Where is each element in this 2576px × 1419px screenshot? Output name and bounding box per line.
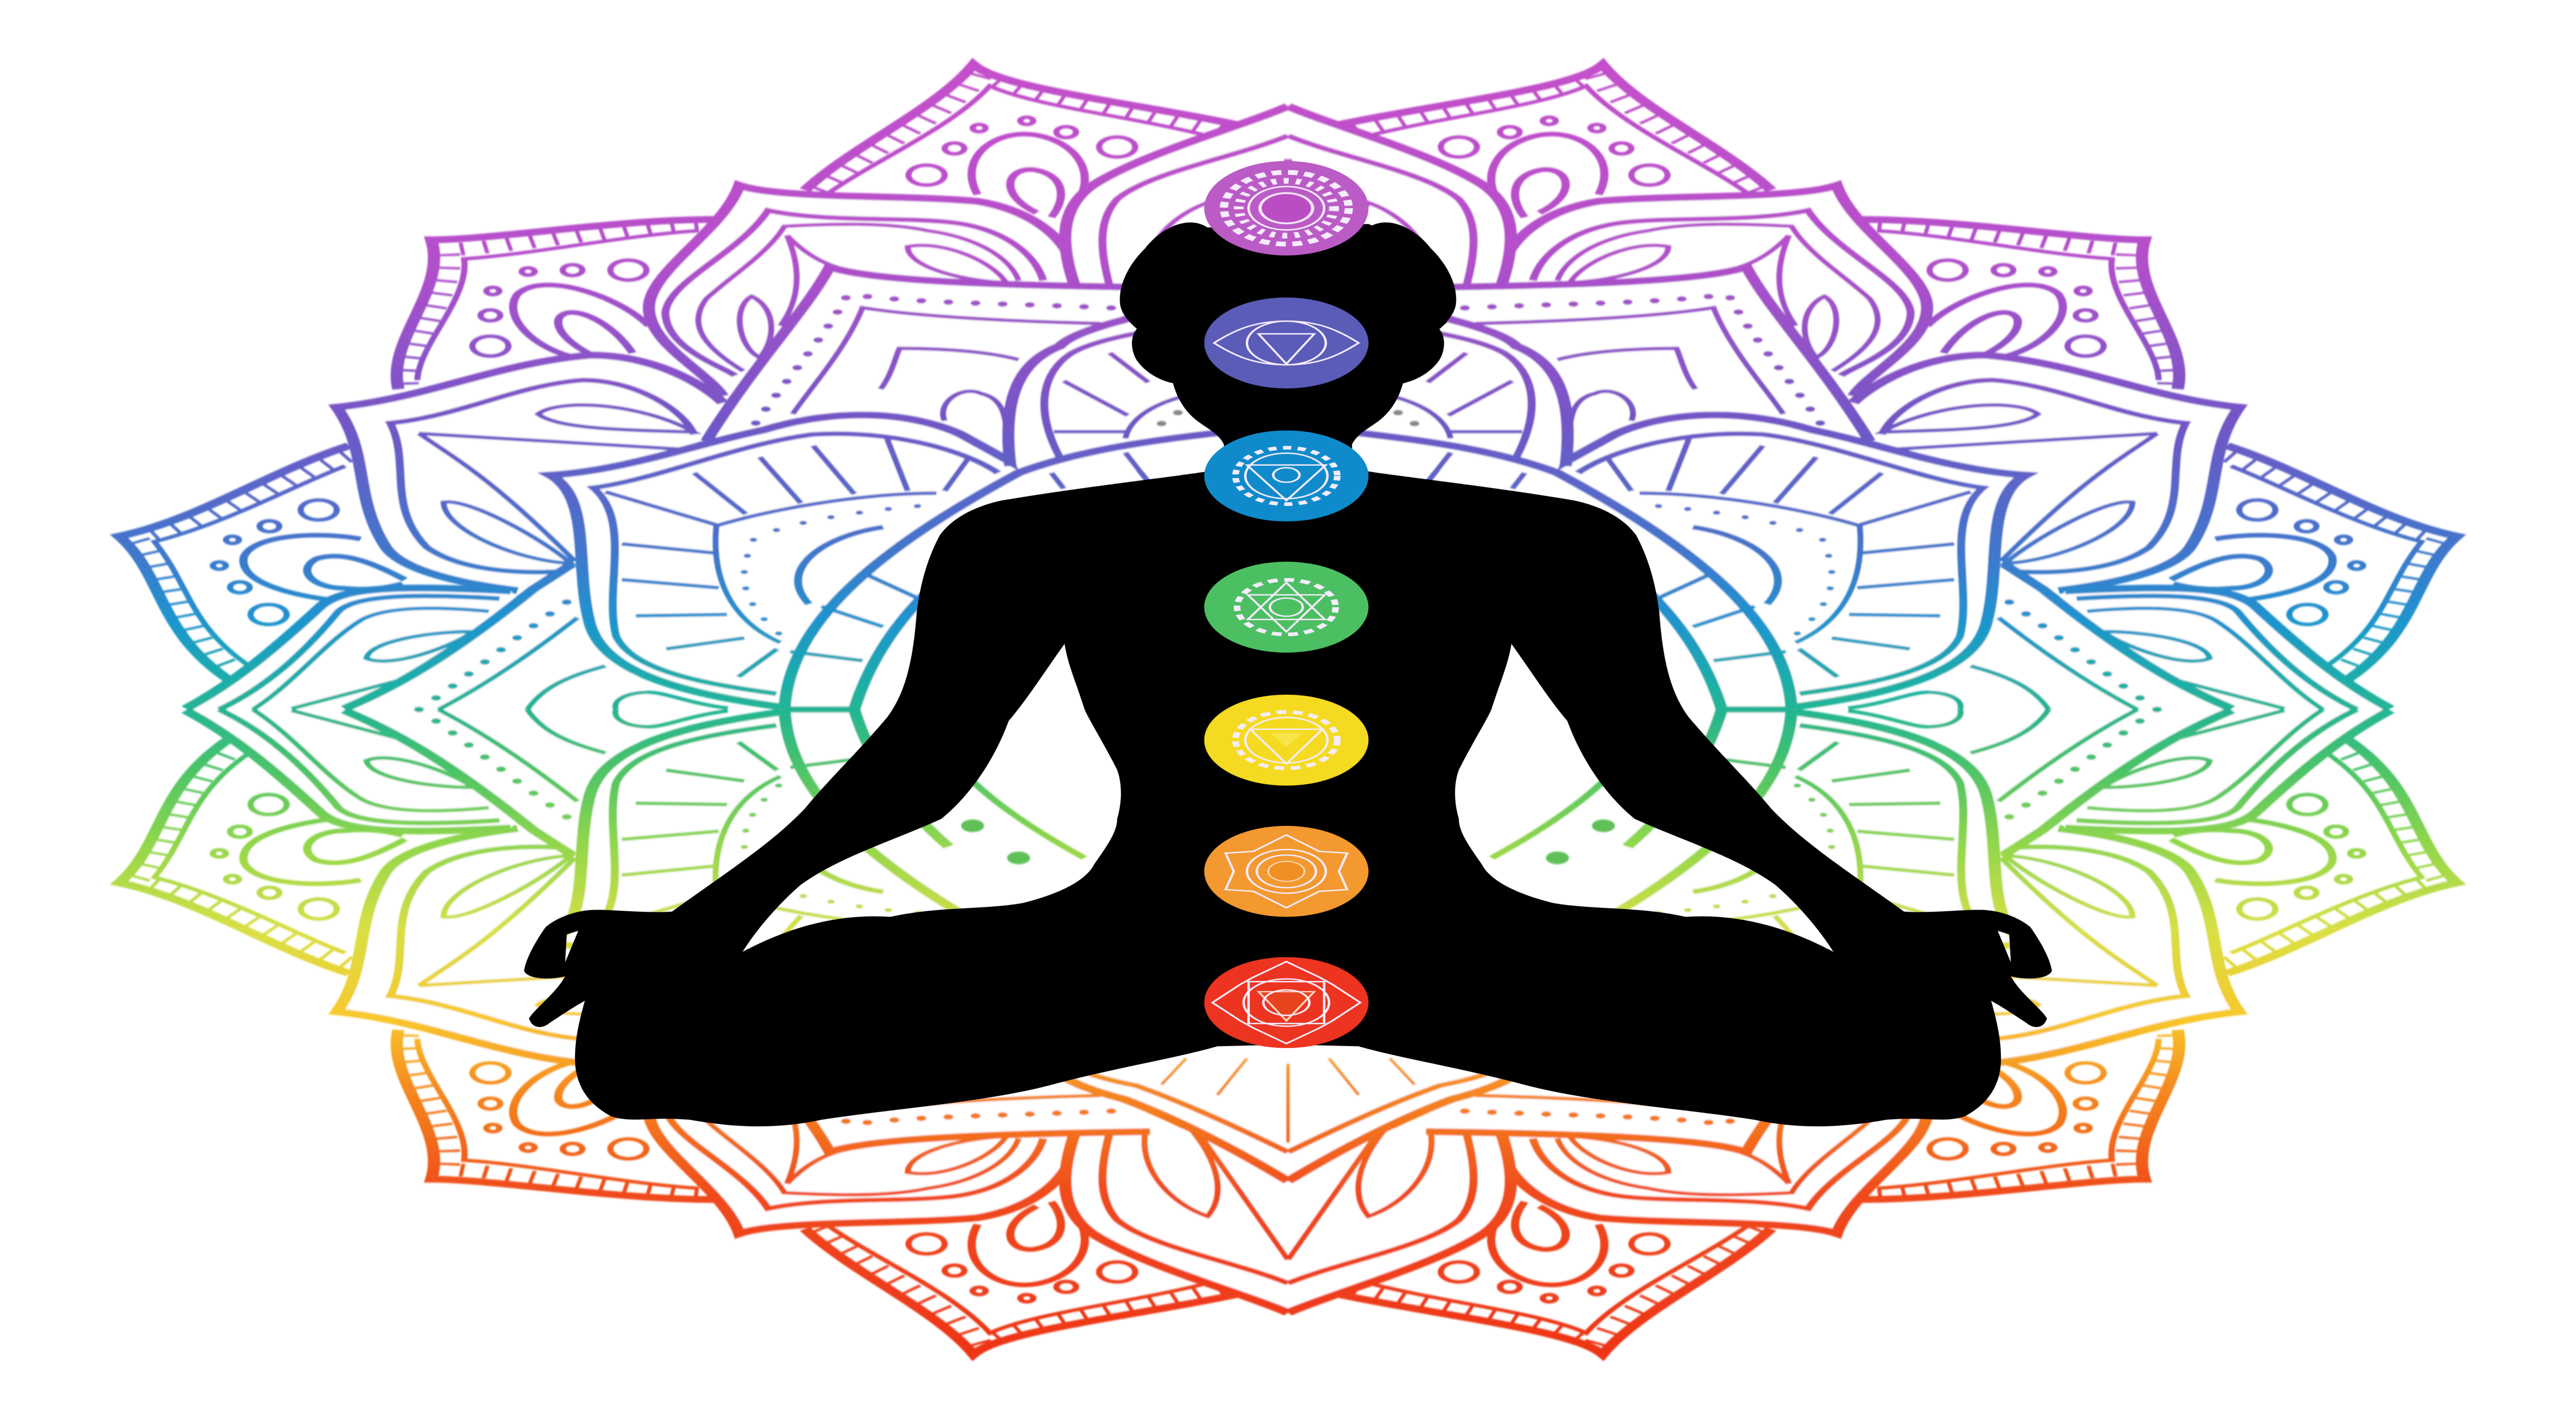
figure: hair xyxy=(1281,224,1452,385)
mandala: upper right quadrant xyxy=(1288,65,2457,711)
mandala: lower left quadrant xyxy=(119,708,1288,1354)
mandala: upper left quadrant xyxy=(119,65,1288,711)
chakra: crown xyxy=(1204,161,1368,256)
chakra: throat xyxy=(1204,430,1368,521)
chakra: sacral xyxy=(1204,826,1368,917)
chakra: root xyxy=(1204,957,1368,1048)
mandala: lower right quadrant xyxy=(1288,708,2457,1354)
chakra: heart xyxy=(1204,562,1368,653)
chakra: solar plexus xyxy=(1204,695,1368,786)
figure: right half xyxy=(1286,223,2052,1126)
chakras xyxy=(1204,161,1368,1048)
seated meditating figure silhouette xyxy=(524,223,2052,1126)
chakra: third eye xyxy=(1204,297,1368,388)
